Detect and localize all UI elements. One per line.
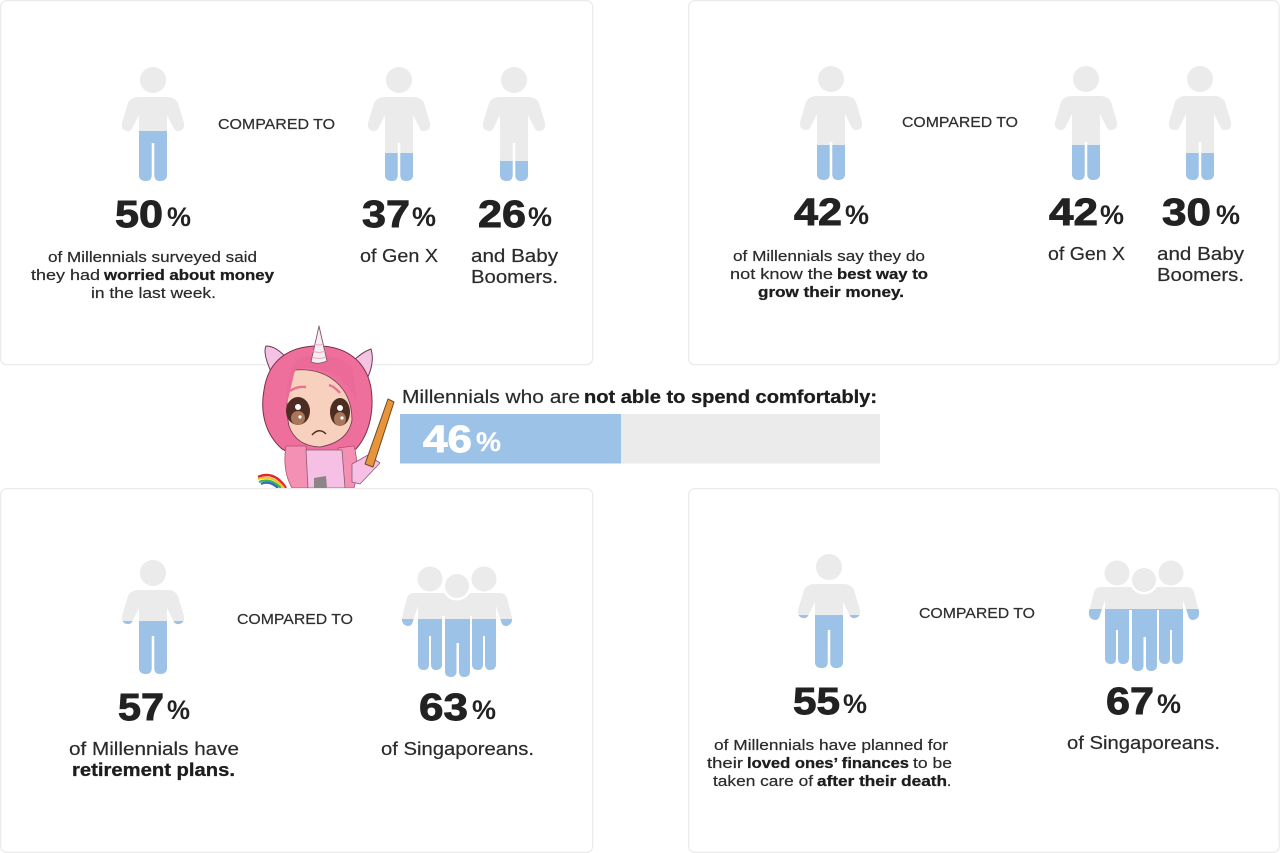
text: millennials worried: they had: [31, 267, 100, 284]
ears: [265, 346, 372, 379]
stat: 55%: 55: [793, 681, 840, 723]
stat: 50%: %: [167, 202, 191, 232]
label: compared to: COMPARED TO: [218, 116, 335, 133]
stat: 67%: %: [1157, 689, 1181, 719]
text: retirement plans: [69, 739, 239, 780]
icon: millennial figure 57%: [122, 560, 184, 674]
stat: 26%: %: [528, 202, 552, 232]
stat: 63%: %: [472, 695, 496, 725]
panel: worried about money: [1, 1, 593, 365]
icon: unicorn girl mascot holding ruler: [258, 326, 394, 488]
eyes: [286, 397, 350, 426]
heading: not able to spend comfortably: Millennials who are: [402, 387, 580, 407]
rainbow tail: [258, 475, 286, 488]
text: and Baby Boomers: Boomers.: [1157, 265, 1244, 285]
bar chart: 46%: %: [476, 427, 501, 457]
text: and Baby Boomers: [1157, 244, 1244, 285]
text: millennials do not know: best way to: [837, 266, 928, 283]
hair back: [263, 346, 372, 458]
text: planned for loved ones: of Millennials have planned for: [714, 737, 948, 754]
icon: millennial figure 50%: [122, 67, 184, 181]
bar chart: 46%: 46: [423, 419, 472, 461]
heading: not able to spend comfortably: [402, 387, 877, 407]
stat: 63%: 63: [419, 687, 468, 729]
stat: 57%: 57: [118, 687, 164, 729]
stat: 30%: 30: [1162, 192, 1211, 234]
stat: 37%: %: [412, 202, 436, 232]
text: planned for loved ones: to be: [913, 755, 952, 772]
label: compared to: COMPARED TO: [902, 114, 1018, 131]
text: millennials worried: worried about money: [103, 267, 275, 284]
text: millennials do not know: [730, 248, 928, 301]
mouth: [312, 431, 326, 435]
text: of Gen X: of Gen X: [1048, 244, 1125, 264]
text: and Baby Boomers: [471, 246, 558, 287]
text: and Baby Boomers: and Baby: [471, 246, 558, 266]
eyebrows: [290, 385, 340, 393]
text: millennials do not know: of Millennials say they do: [733, 248, 925, 265]
stat: 26%: [478, 194, 552, 236]
stat: 30%: [1162, 192, 1240, 234]
text: planned for loved ones: [707, 737, 952, 790]
stat: 42%: [794, 192, 869, 234]
stat: 57%: [118, 687, 190, 729]
icon: Gen X figure 37%: [368, 67, 430, 181]
stat: 50%: 50: [115, 194, 163, 236]
icon: Gen X figure 42%: [1055, 66, 1117, 180]
stat: 67%: 67: [1106, 681, 1154, 723]
face: [287, 370, 352, 447]
stat: 37%: 37: [362, 194, 410, 236]
heading: not able to spend comfortably: not able to spend comfortably:: [584, 387, 877, 407]
text: millennials do not know: not know the: [730, 266, 833, 283]
icon: group of Singaporeans 67%: [1089, 560, 1199, 671]
text: millennials do not know: grow their money.: [758, 284, 904, 301]
braids: [285, 446, 357, 488]
bar chart: 46%: [400, 414, 880, 464]
stat: 55%: %: [843, 689, 867, 719]
text: planned for loved ones: after their death: [817, 773, 947, 790]
text: planned for loved ones: loved ones’ finances: [747, 755, 909, 772]
horn: [311, 326, 327, 363]
stat: 42%: %: [845, 200, 869, 230]
icon: millennial figure 42%: [800, 66, 862, 180]
label: compared to: COMPARED TO: [237, 611, 353, 628]
panel: best way to grow money: [689, 1, 1279, 365]
text: of Gen X: of Gen X: [360, 246, 438, 266]
stat: 57%: %: [167, 695, 190, 725]
text: retirement plans: of Millennials have: [69, 739, 239, 759]
body: [306, 450, 345, 488]
label: compared to: COMPARED TO: [919, 605, 1035, 622]
text: planned for loved ones: their: [707, 755, 743, 772]
text: and Baby Boomers: Boomers.: [471, 267, 558, 287]
stat: 42% Gen X: %: [1100, 200, 1124, 230]
text: millennials worried: of Millennials surveyed said: [48, 249, 257, 266]
ruler: [365, 399, 394, 467]
stat: 42% Gen X: [1049, 192, 1124, 234]
stat: 63%: [419, 687, 496, 729]
fringe highlight: [286, 370, 297, 404]
stat: 67%: [1106, 681, 1181, 723]
text: of Singaporeans: of Singaporeans.: [381, 739, 534, 759]
panel: loved ones' finances: [689, 489, 1279, 852]
text: of Singaporeans: of Singaporeans.: [1067, 733, 1220, 753]
stat: 26%: 26: [478, 194, 526, 236]
icon: group of Singaporeans 63%: [402, 566, 512, 677]
icon: millennial figure 55%: [798, 554, 860, 668]
stat: 42%: 42: [794, 192, 842, 234]
stat: 42% Gen X: 42: [1049, 192, 1098, 234]
stat: 37%: [362, 194, 436, 236]
stat: 50%: [115, 194, 191, 236]
text: millennials worried: [31, 249, 275, 302]
panel: retirement plans: [1, 489, 593, 852]
stat: 30%: %: [1216, 200, 1240, 230]
stat: 55%: [793, 681, 867, 723]
text: and Baby Boomers: and Baby: [1157, 244, 1244, 264]
text: planned for loved ones: taken care of: [713, 773, 814, 790]
icon: Baby Boomer figure 26%: [483, 67, 545, 181]
text: millennials worried: in the last week.: [91, 285, 216, 302]
text: planned for loved ones: .: [947, 773, 951, 790]
text: retirement plans: retirement plans.: [72, 760, 235, 780]
icon: Baby Boomer figure 30%: [1169, 66, 1231, 180]
